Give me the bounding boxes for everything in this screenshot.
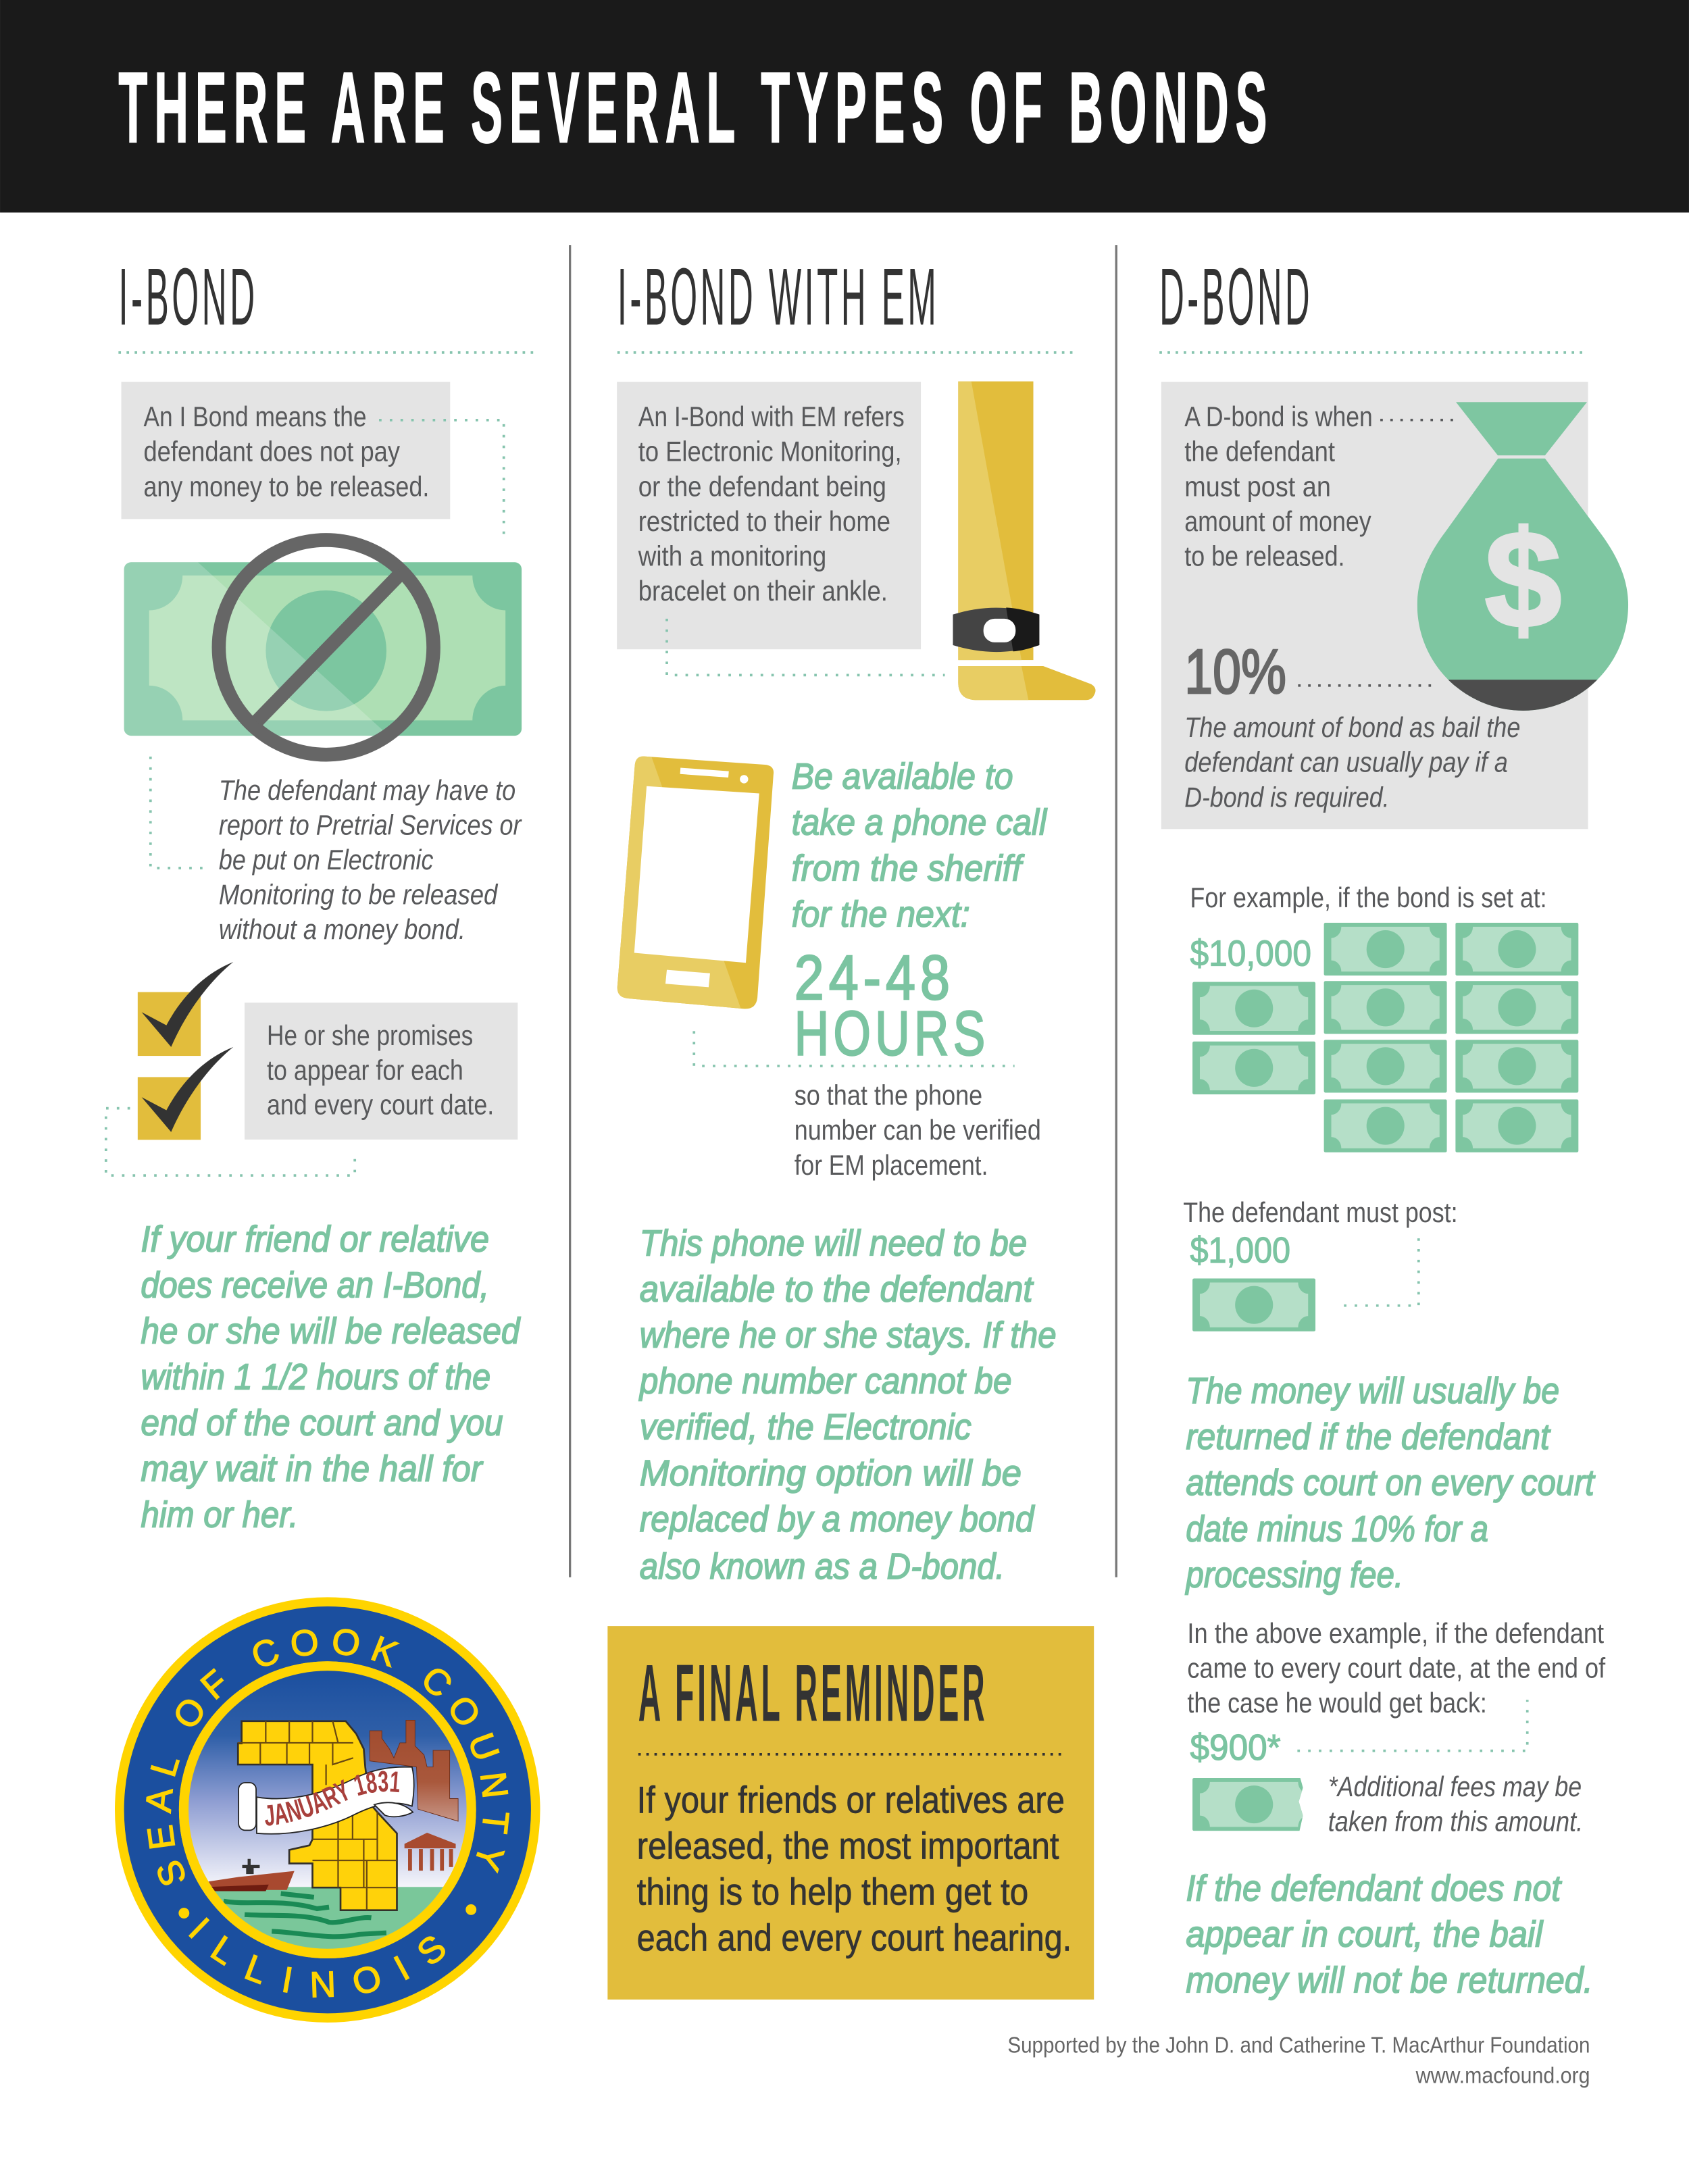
skyline bbox=[370, 1720, 458, 1821]
ribbon bbox=[257, 1767, 414, 1834]
definition box: bracelet on their ankle. bbox=[638, 576, 888, 607]
green callout: returned if the defendant bbox=[1186, 1417, 1551, 1457]
fees footnote: taken from this amount. bbox=[1328, 1806, 1583, 1837]
green warning: If the defendant does not bbox=[1186, 1868, 1562, 1908]
definition box: with a monitoring bbox=[638, 540, 826, 572]
post label: The defendant must post: bbox=[1183, 1197, 1458, 1228]
green warning: appear in court, the bail bbox=[1186, 1914, 1544, 1955]
definition panel: to be released. bbox=[1184, 540, 1344, 572]
amount: $1,000: $1,000 bbox=[1190, 1230, 1290, 1271]
definition box: restricted to their home bbox=[638, 506, 890, 537]
phone verification note: so that the phone bbox=[795, 1080, 982, 1111]
definition box bbox=[121, 382, 450, 519]
torn bill bbox=[1192, 1778, 1303, 1831]
green callout: within 1 1/2 hours of the bbox=[141, 1356, 490, 1397]
definition panel: A D-bond is when bbox=[1184, 401, 1373, 432]
definition panel: must post an bbox=[1184, 471, 1331, 502]
phone verification note bbox=[795, 1080, 1041, 1181]
green callout: date minus 10% for a bbox=[1186, 1508, 1488, 1549]
24-48 hours figure bbox=[795, 942, 990, 1068]
10 percent note: D-bond is required. bbox=[1184, 782, 1389, 813]
amount: $10,000: $10,000 bbox=[1190, 933, 1311, 973]
10 percent note bbox=[1184, 712, 1520, 813]
green call notice: take a phone call bbox=[792, 803, 1048, 843]
example result text: In the above example, if the defendant bbox=[1187, 1618, 1605, 1649]
green callout: phone number cannot be bbox=[638, 1361, 1012, 1402]
column 3: D-Bond: D-BOND bbox=[1159, 253, 1313, 342]
green callout: attends court on every court bbox=[1186, 1463, 1596, 1503]
green call notice: for the next: bbox=[792, 894, 970, 935]
seal scene: JANUARY 1831 bbox=[265, 1771, 399, 1826]
column 1: I-Bond: I-BOND bbox=[118, 253, 258, 342]
italic note: Monitoring to be released bbox=[219, 880, 499, 911]
definition box: to Electronic Monitoring, bbox=[638, 436, 902, 467]
seal lettering: ILLINOIS bbox=[188, 1917, 445, 1998]
icon: banned dollar bill bbox=[124, 540, 522, 755]
green callout: If your friend or relative bbox=[141, 1219, 489, 1259]
ship bbox=[209, 1871, 295, 1890]
promise box: He or she promises bbox=[267, 1020, 473, 1051]
green callout: The money will usually be bbox=[1186, 1371, 1559, 1411]
phone verification note: for EM placement. bbox=[795, 1150, 988, 1181]
definition panel bbox=[1161, 382, 1588, 829]
example result text: came to every court date, at the end of bbox=[1187, 1652, 1606, 1683]
green call notice: from the sheriff bbox=[792, 848, 1025, 889]
green callout: where he or she stays. If the bbox=[640, 1315, 1057, 1356]
green callout: This phone will need to be bbox=[640, 1223, 1027, 1263]
icon: phone bbox=[617, 757, 774, 1009]
italic note: without a money bond. bbox=[219, 914, 465, 945]
green warning bbox=[1186, 1868, 1593, 2001]
column dividers bbox=[570, 245, 1116, 1577]
green callout: also known as a D-bond. bbox=[640, 1546, 1005, 1587]
final reminder text: each and every court hearing. bbox=[637, 1917, 1072, 1959]
final reminder text: released, the most important bbox=[637, 1825, 1059, 1867]
example result text bbox=[1187, 1618, 1606, 1719]
fees footnote: *Additional fees may be bbox=[1328, 1771, 1582, 1802]
green callout: may wait in the hall for bbox=[141, 1449, 484, 1490]
definition box bbox=[617, 382, 921, 649]
definition box: or the defendant being bbox=[638, 471, 886, 502]
footer credit: Supported by the John D. and Catherine T. MacArthur Foundation bbox=[1007, 2032, 1590, 2057]
final reminder text bbox=[637, 1779, 1072, 1959]
county map bbox=[238, 1721, 397, 1910]
10 percent note: The amount of bond as bail the bbox=[1184, 712, 1520, 743]
icon: ankle monitor leg bbox=[953, 382, 1096, 700]
green callout: replaced by a money bond bbox=[640, 1499, 1036, 1540]
green callout bbox=[141, 1219, 521, 1535]
green callout: verified, the Electronic bbox=[640, 1407, 972, 1448]
amount: $900: $900* bbox=[1190, 1727, 1281, 1768]
green callout: processing fee. bbox=[1185, 1554, 1403, 1595]
panel: final reminder: A FINAL REMINDER bbox=[638, 1648, 988, 1738]
green call notice: Be available to bbox=[792, 756, 1013, 796]
temple bbox=[405, 1833, 456, 1871]
italic note: report to Pretrial Services or bbox=[219, 810, 522, 841]
green callout: he or she will be released bbox=[141, 1311, 521, 1351]
10 percent note: defendant can usually pay if a bbox=[1184, 747, 1508, 778]
footer credit: www.macfound.org bbox=[1415, 2063, 1590, 2088]
promise box bbox=[245, 1002, 518, 1140]
24-48 hours figure: 24-48 bbox=[795, 942, 955, 1013]
ten dollar bills bbox=[1192, 923, 1578, 1152]
green callout bbox=[1185, 1371, 1596, 1595]
final reminder text: thing is to help them get to bbox=[637, 1871, 1028, 1913]
green warning: money will not be returned. bbox=[1186, 1960, 1593, 2001]
column 3: D-Bond bbox=[1159, 253, 1638, 2001]
seal of Cook County bbox=[115, 1597, 540, 2023]
column 1: I-Bond bbox=[106, 253, 535, 1535]
fees footnote bbox=[1328, 1771, 1583, 1837]
green callout: Monitoring option will be bbox=[640, 1453, 1022, 1494]
definition box: An I Bond means the bbox=[143, 401, 367, 432]
green callout: end of the court and you bbox=[141, 1403, 503, 1444]
icon: money bag: $ bbox=[1485, 503, 1561, 657]
seal lettering bbox=[146, 1629, 509, 1998]
example result text: the case he would get back: bbox=[1187, 1687, 1487, 1719]
definition panel: the defendant bbox=[1184, 436, 1336, 467]
promise box: and every court date. bbox=[267, 1089, 494, 1120]
10 percent figure: 10% bbox=[1184, 636, 1286, 707]
definition box: An I-Bond with EM refers bbox=[638, 401, 905, 432]
italic note: be put on Electronic bbox=[219, 844, 434, 875]
final reminder text: If your friends or relatives are bbox=[637, 1779, 1065, 1821]
italic note: The defendant may have to bbox=[219, 775, 515, 806]
green callout: does receive an I-Bond, bbox=[141, 1265, 489, 1305]
green callout: him or her. bbox=[141, 1495, 298, 1535]
24-48 hours figure: HOURS bbox=[795, 998, 990, 1068]
example label: For example, if the bond is set at: bbox=[1190, 882, 1547, 913]
definition box: defendant does not pay bbox=[143, 436, 400, 467]
definition box: any money to be released. bbox=[143, 471, 429, 502]
panel: final reminder bbox=[607, 1626, 1094, 2000]
seal lettering: SEAL OF COOK COUNTY bbox=[146, 1629, 509, 1885]
footer credit bbox=[1007, 2032, 1590, 2088]
definition panel: amount of money bbox=[1184, 506, 1371, 537]
promise box: to appear for each bbox=[267, 1055, 463, 1086]
icon: money bag bbox=[1407, 402, 1638, 721]
green callout: available to the defendant bbox=[640, 1269, 1034, 1310]
green callout bbox=[638, 1223, 1057, 1587]
icon: two checked boxes bbox=[138, 962, 233, 1140]
green call notice bbox=[792, 756, 1048, 935]
phone verification note: number can be verified bbox=[795, 1115, 1041, 1146]
one bill bbox=[1192, 1278, 1315, 1331]
column 2: I-Bond with EM bbox=[613, 253, 1096, 1587]
header band bbox=[0, 0, 1689, 213]
italic note bbox=[219, 775, 522, 945]
column 2: I-Bond with EM: I-BOND WITH EM bbox=[617, 253, 939, 342]
seal scene bbox=[188, 1671, 467, 1949]
